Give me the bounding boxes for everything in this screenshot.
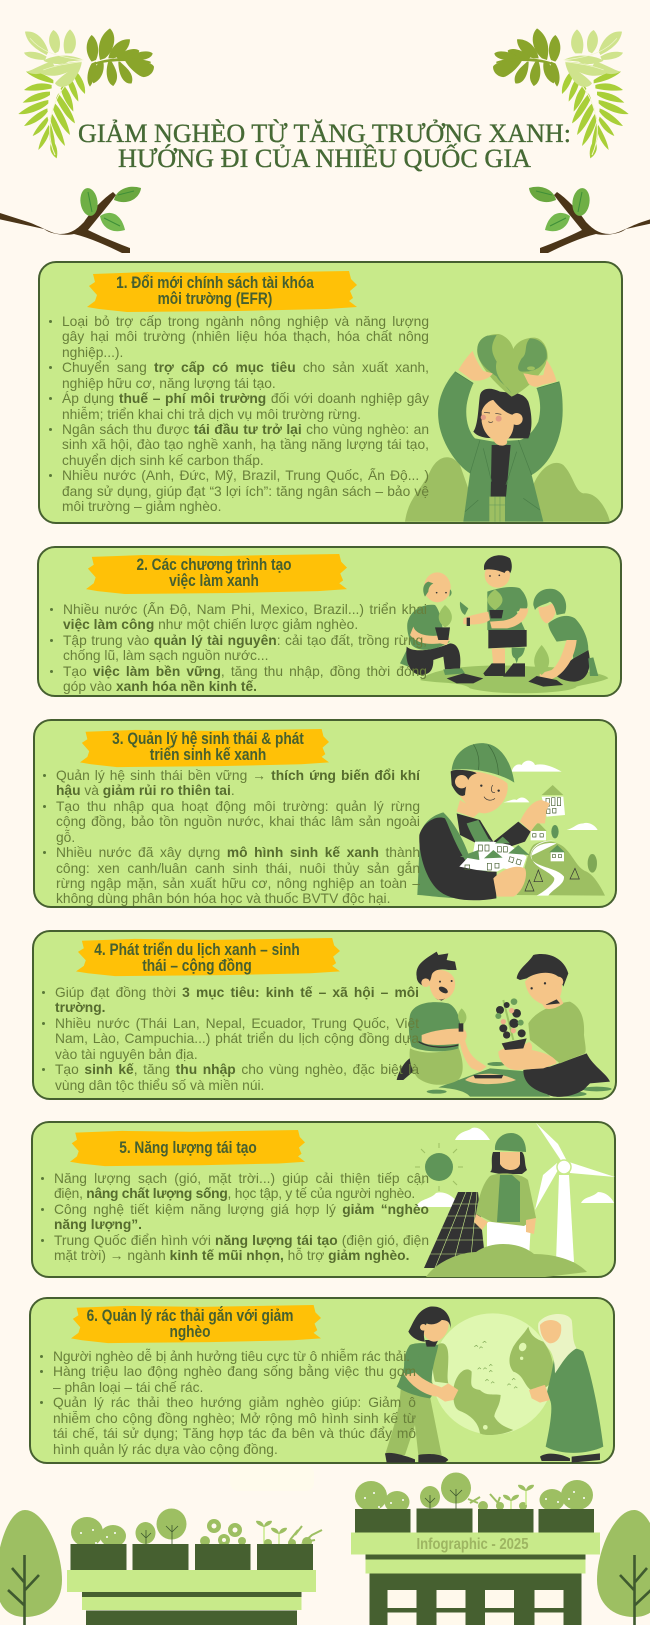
banner	[71, 1305, 321, 1344]
bullets: Nam, Lào, Campuchia...) phát triển du lịch cộng đồng dựa	[55, 1031, 419, 1046]
bullets: Tạo sinh kế, tăng thu nhập cho vùng nghèo, đặc biệt là	[55, 1062, 419, 1077]
bullets: Tập trung vào quản lý tài nguyên: cải tạo đất, trồng rừng,	[63, 633, 427, 648]
bullets: mặt trời) → ngành kinh tế mũi nhọn, hỗ trợ giảm nghèo.	[54, 1248, 409, 1263]
bullets: Nhiều nước (Thái Lan, Nepal, Ecuador, Trung Quốc, Việt	[55, 1016, 419, 1031]
heading: việc làm xanh	[169, 572, 259, 590]
bullets: rừng ngập mặn, sản xuất hữu cơ, nông nghiệp an toàn –	[56, 876, 420, 891]
panel background	[33, 719, 617, 908]
branch right	[529, 187, 650, 253]
bullets: công: xen canh/luân canh sinh thái, nuôi thủy sản gắn	[56, 861, 420, 876]
bullets: tái chế, tái sử dụng; Tăng hợp tác đa bên và thúc đẩy mô	[53, 1426, 416, 1441]
illustration: woman holding heart globe	[405, 334, 610, 522]
title: GIẢM NGHÈO TỪ TĂNG TRƯỞNG XANH:	[78, 119, 571, 148]
banner	[87, 271, 357, 312]
bullets: nhiễm; triển khai chi trả dịch vụ môi trường rừng.	[62, 407, 361, 422]
panel 2: green jobs	[37, 546, 622, 697]
bullets: không dùng phân bón hóa học và thuốc BVTV độc hại.	[56, 891, 390, 906]
heading: 3. Quản lý hệ sinh thái & phát	[112, 730, 304, 748]
bullets: nhiễm cho cộng đồng nghèo; Mở rộng mô hình sinh kế từ	[53, 1411, 416, 1426]
panel background	[32, 930, 617, 1100]
panel background	[29, 1297, 615, 1464]
panel background	[38, 261, 623, 524]
left building	[67, 1508, 322, 1625]
bullets: môi trường – giảm nghèo.	[62, 499, 221, 514]
bullets: năng lượng”.	[54, 1217, 142, 1232]
bullets: Quản lý rác thải theo hướng giảm nghèo giúp: Giảm ô	[53, 1395, 416, 1410]
bullets: Hàng triệu lao động nghèo đang sống bằng việc thu gom	[53, 1364, 416, 1379]
banner	[86, 554, 347, 594]
bullets: gây hại môi trường (nhiên liệu hóa thạch, hóa chất nông	[62, 329, 429, 344]
bullets: điện, nâng chất lượng sống, học tập, y tế của người nghèo.	[54, 1186, 415, 1201]
panel 1: EFR	[38, 261, 623, 524]
illustration: man with houses and hill	[417, 743, 605, 900]
bullets: Tạo thu nhập qua hoạt động môi trường: quản lý rừng	[56, 799, 420, 814]
banner	[80, 729, 329, 768]
bullets: Giúp đạt đồng thời 3 mục tiêu: kinh tế – xã hội – môi	[55, 985, 419, 1000]
bullets: Ngân sách thu được tái đầu tư trở lại cho vùng nghèo: an	[62, 422, 429, 437]
bullets: đang sử dụng, giúp đạt “3 lợi ích”: tăng ngân sách – bảo vệ	[62, 484, 429, 499]
bullets	[42, 985, 419, 1093]
heading: 6. Quản lý rác thải gắn với giảm	[87, 1307, 293, 1325]
faint highlight	[230, 1465, 314, 1491]
banner	[70, 1130, 305, 1166]
bullets	[40, 1348, 416, 1457]
bullets	[43, 768, 420, 906]
top decoration: foliage and branches	[0, 28, 650, 253]
bullets: – phân loại – tái chế rác.	[53, 1380, 203, 1395]
illustration: two people holding globe	[385, 1306, 604, 1463]
bullets: Nhiều nước (Ấn Độ, Nam Phi, Mexico, Brazil...) triển khai	[63, 602, 427, 617]
heading: 2. Các chương trình tạo	[136, 556, 292, 574]
bullets: Người nghèo dễ bị ảnh hưởng tiêu cực từ ô nhiễm rác thải.	[53, 1349, 410, 1364]
heading	[94, 941, 300, 975]
title: HƯỚNG ĐI CỦA NHIỀU QUỐC GIA	[118, 144, 531, 173]
right tree	[597, 1510, 650, 1625]
foliage left	[18, 28, 154, 158]
heading: triển sinh kế xanh	[150, 746, 266, 764]
bullets: Quản lý hệ sinh thái bền vững → thích ứng biến đổi khí	[56, 768, 420, 783]
bullets	[50, 602, 427, 694]
heading: 4. Phát triển du lịch xanh – sinh	[94, 941, 300, 959]
panel 3: ecosystems	[33, 719, 617, 908]
panel 5: renewable energy	[31, 1121, 616, 1278]
bullets: Công nghệ tiết kiệm năng lượng giá hợp lý giảm “nghèo	[54, 1202, 429, 1217]
bullets	[41, 1171, 429, 1263]
bullets: gỗ.	[56, 830, 75, 845]
heading: 5. Năng lượng tái tạo	[119, 1139, 257, 1157]
bullets: chống lũ, làm sạch nguồn nước...	[63, 648, 268, 663]
title	[78, 119, 571, 173]
bullets: Nhiều nước đã xây dựng mô hình sinh kế xanh thành	[56, 845, 420, 860]
bullets: cộng đồng, bảo tồn nguồn nước, khai thác lâm sản ngoài	[56, 814, 420, 829]
panel 6: waste management	[29, 1297, 615, 1464]
bullets: góp vào xanh hóa nền kinh tế.	[63, 679, 257, 694]
bullets: vào tài nguyên bản địa.	[55, 1047, 198, 1062]
bullets: trường.	[55, 1000, 105, 1015]
bullets: Tạo việc làm bền vững, tăng thu nhập, đồng thời đóng	[63, 664, 427, 679]
panel 4: green tourism	[32, 930, 617, 1100]
bullets: Loại bỏ trợ cấp trong ngành nông nghiệp và năng lượng	[62, 314, 429, 329]
heading: 1. Đổi mới chính sách tài khóa	[116, 274, 314, 292]
bullets: hình quản lý rác dựa vào cộng đồng.	[53, 1442, 278, 1457]
banner	[76, 938, 340, 976]
heading: môi trường (EFR)	[158, 290, 272, 308]
bullets: hậu và giảm rủi ro thiên tai.	[56, 783, 235, 798]
heading	[87, 1306, 293, 1341]
foliage right	[493, 28, 629, 158]
bullets: Năng lượng sạch (gió, mặt trời...) giúp cải thiện tiếp cận	[54, 1171, 429, 1186]
left tree	[0, 1510, 62, 1625]
bullets: vùng dân tộc thiểu số và miền núi.	[55, 1078, 264, 1093]
bullets: sinh xã hội, đào tạo nghề xanh, hạ tầng năng lượng tái tạo,	[62, 437, 429, 452]
illustration: two men planting	[396, 952, 612, 1097]
bottom illustration: trees and green buildings	[0, 1472, 650, 1625]
label: Infographic 2025: Infographic - 2025	[416, 1536, 529, 1553]
bullets: Nhiều nước (Anh, Đức, Mỹ, Brazil, Trung Quốc, Ấn Độ... )	[62, 468, 429, 483]
bullets	[49, 314, 429, 514]
bullets: việc làm công như một chiến lược giảm nghèo.	[63, 617, 358, 632]
bullets: chuyển dịch sinh kế carbon thấp.	[62, 453, 264, 468]
right building	[351, 1472, 600, 1625]
bullets: Trung Quốc điển hình với năng lượng tái tạo (điện gió, điện	[54, 1233, 429, 1248]
bullets: nghiệp...).	[62, 345, 123, 360]
illustration: three people planting	[400, 555, 608, 694]
illustration: worker, solar panel, wind turbine	[415, 1123, 615, 1277]
branch left	[0, 187, 141, 253]
heading	[136, 556, 292, 590]
heading: nghèo	[169, 1323, 211, 1341]
bullets: nghiệp hữu cơ, năng lượng tái tạo.	[62, 376, 276, 391]
heading	[116, 274, 314, 308]
panel background	[31, 1121, 616, 1278]
panel background	[37, 546, 622, 697]
heading: thái – cộng đồng	[142, 957, 252, 975]
heading	[112, 730, 304, 764]
